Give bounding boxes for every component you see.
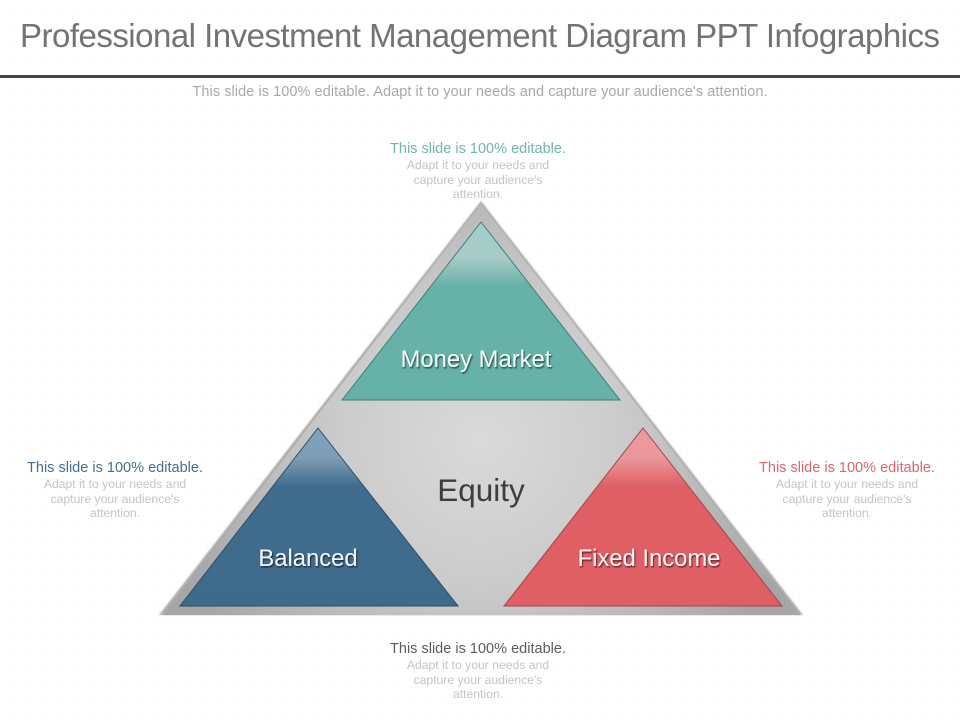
segment: fixed income: Fixed Income [578,545,720,572]
callout: balanced: Adapt it to your needs and [44,477,186,491]
callout: balanced [27,460,203,520]
callout: equity: capture your audience's [413,673,543,687]
callout: equity: This slide is 100% editable. [390,641,566,657]
callout: money market: attention. [453,187,503,201]
segment: fixed income [504,428,782,606]
callout: equity: attention. [453,687,503,701]
subtitle: This slide is 100% editable. Adapt it to your needs and capture your audience's attention. [192,84,768,100]
callout: balanced: This slide is 100% editable. [27,460,203,476]
callout: equity [390,641,566,701]
callout: balanced: capture your audience's [50,492,180,506]
pyramid diagram [159,201,803,615]
callout: balanced: attention. [90,506,140,520]
callout: fixed income: Adapt it to your needs and [776,477,918,491]
segment: balanced [180,428,458,606]
callout: money market [390,141,566,201]
segment: money market [342,222,620,400]
callout: fixed income [759,460,935,520]
callout: fixed income: attention. [822,506,872,520]
segment: balanced: Balanced [258,545,358,572]
pyramid: outer grey triangle [159,201,803,615]
callout: money market: Adapt it to your needs and [407,158,549,172]
callout: fixed income: capture your audience's [782,492,912,506]
title: Professional Investment Management Diagram PPT Infographics [20,17,940,54]
callout: money market: capture your audience's [413,173,543,187]
title rule [0,75,960,78]
callout: fixed income: This slide is 100% editable. [759,460,935,476]
segment: money market: Money Market [401,346,552,373]
callout: money market: This slide is 100% editable. [390,141,566,157]
center label: equity: Equity [437,472,525,508]
callout: equity: Adapt it to your needs and [407,658,549,672]
